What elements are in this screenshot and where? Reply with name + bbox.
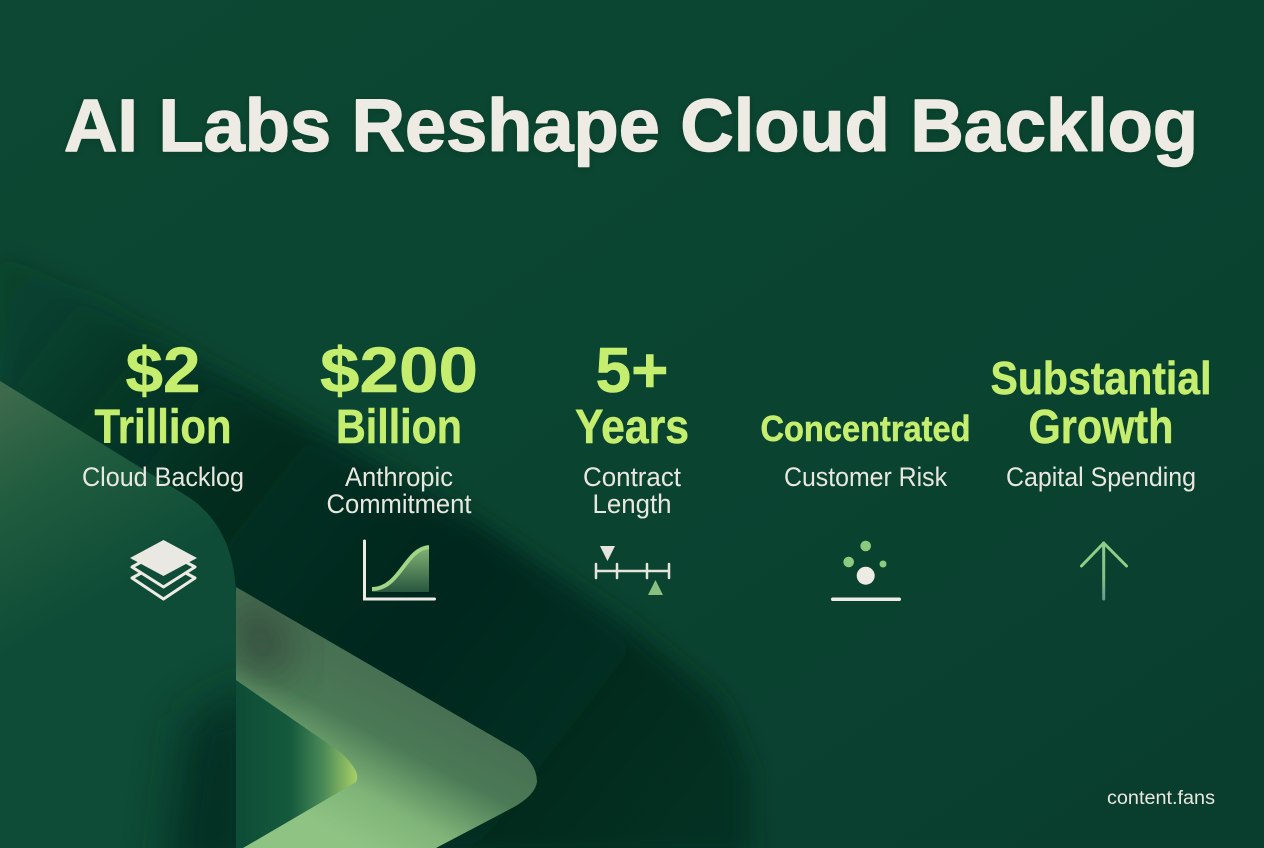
value: Concentrated: Concentrated (760, 408, 970, 449)
icon: growth curve chart (364, 541, 434, 599)
label: Contract Length: Contract (583, 462, 681, 492)
value: 5+ Years: Years (575, 401, 689, 454)
value: $200 Billion: $200 (320, 334, 478, 406)
label: Capital Spending: Capital Spending (1006, 462, 1196, 492)
value: Substantial Growth: Growth (1028, 401, 1174, 454)
footer: source: content.fans (1107, 788, 1215, 809)
label: Contract Length (583, 462, 681, 519)
label: Contract Length: Length (592, 489, 672, 519)
abstract shape: diagonal shadow (0, 255, 750, 848)
value: $2 Trillion: $2 (126, 334, 200, 406)
abstract shape: folded light green strip (236, 580, 546, 848)
value: $200 Billion (320, 334, 478, 454)
icon: timeline with markers (596, 546, 669, 595)
label: Anthropic Commitment: Commitment (326, 489, 472, 519)
value: Substantial Growth (990, 352, 1212, 454)
label: Anthropic Commitment (326, 462, 472, 519)
metric: $2 Trillion Cloud Backlog (82, 334, 244, 599)
value: 5+ Years (575, 334, 689, 454)
value: $2 Trillion (94, 334, 232, 454)
abstract shape: rounded left panel (0, 381, 236, 848)
icon: stacked layers (130, 540, 197, 599)
value: $200 Billion: Billion (336, 401, 462, 454)
icon: clustered dots (831, 541, 901, 601)
value: Substantial Growth: Substantial (990, 352, 1212, 404)
icon: upward arrow (1082, 543, 1126, 599)
label: Cloud Backlog: Cloud Backlog (82, 462, 244, 492)
metric: 5+ Years Contract Length (575, 334, 689, 595)
value: $2 Trillion: Trillion (94, 401, 232, 454)
label: Customer Risk: Customer Risk (784, 462, 947, 492)
metric: Concentrated Customer Risk (760, 408, 970, 601)
title: AI Labs Reshape Cloud Backlog (64, 84, 1198, 167)
metric: Substantial Growth Capital Spending (990, 352, 1212, 599)
value: 5+ Years: 5+ (596, 334, 668, 406)
label: Anthropic Commitment: Anthropic (345, 462, 453, 492)
metric: $200 Billion Anthropic Commitment (320, 334, 478, 599)
